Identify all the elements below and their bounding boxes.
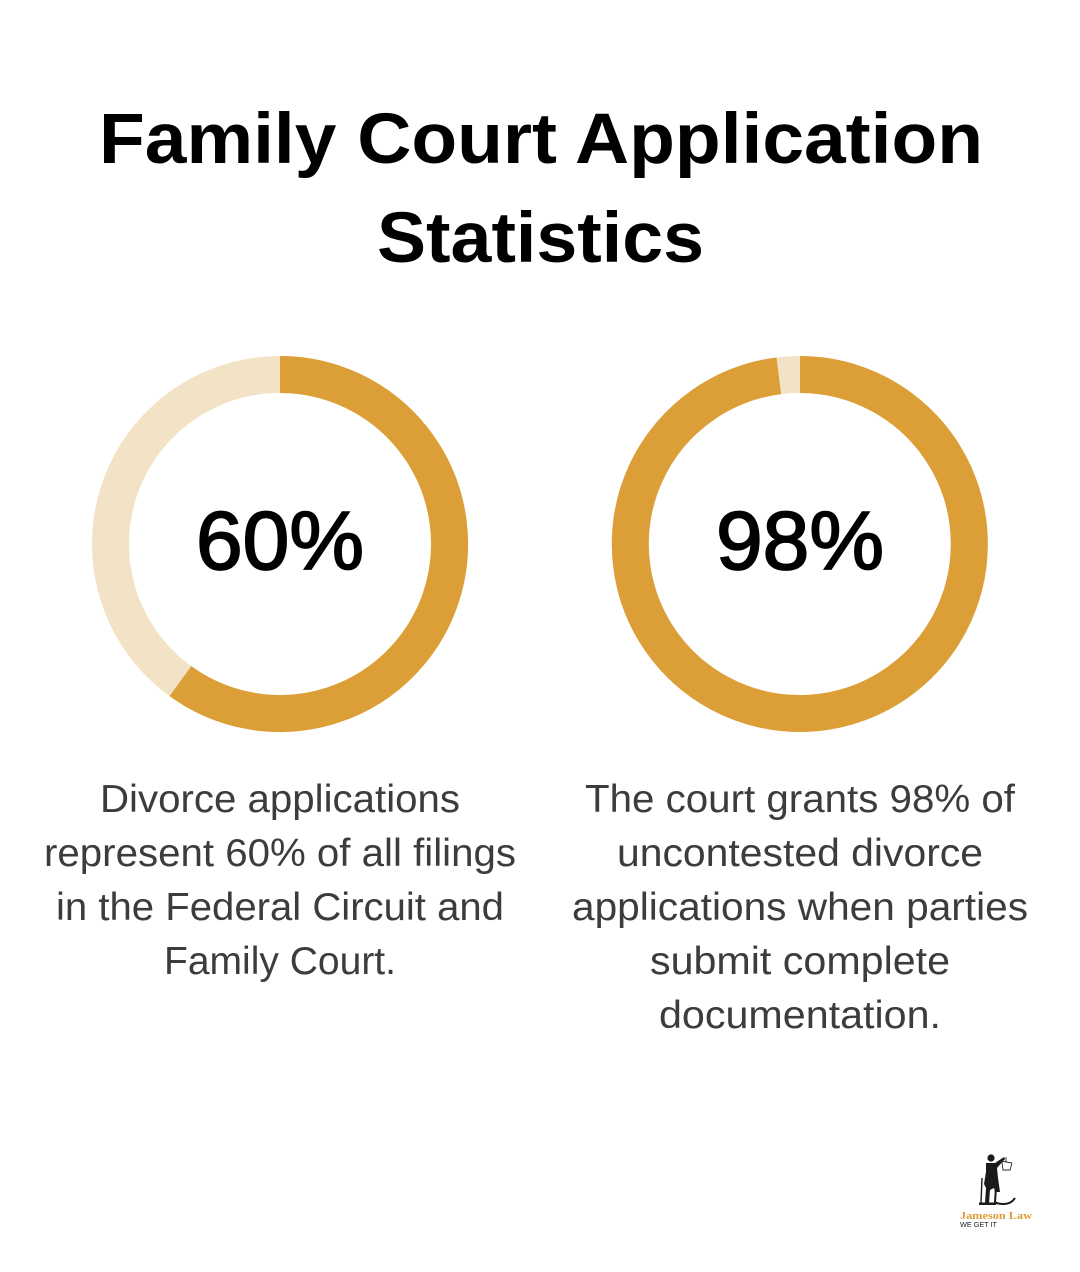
description: uncontested divorce: applications when parties	[572, 886, 1028, 929]
stat value: 60%: 60%	[196, 494, 364, 587]
description: divorce applications: Divorce applications	[100, 778, 460, 821]
description: uncontested divorce: documentation.	[659, 994, 941, 1037]
description: uncontested divorce: The court grants 98% of	[585, 778, 1015, 821]
description: uncontested divorce	[572, 778, 1028, 1037]
donut chart: 98%	[630, 374, 970, 714]
description: divorce applications: Family Court.	[164, 940, 396, 983]
title: Family Court Application	[99, 100, 983, 179]
title	[99, 100, 983, 278]
icon: lady justice	[979, 1154, 1015, 1205]
description: divorce applications: represent 60% of all filings	[44, 832, 516, 875]
description: divorce applications	[44, 778, 516, 983]
logo: Jameson Law	[960, 1154, 1032, 1229]
panel: uncontested divorce statistic	[572, 374, 1028, 1037]
donut chart: 60%	[110, 374, 450, 714]
panel: divorce applications statistic	[44, 374, 516, 983]
logo tagline: WE GET IT	[960, 1222, 998, 1229]
title: Statistics	[377, 199, 704, 278]
description: uncontested divorce: submit complete	[650, 940, 950, 983]
description: uncontested divorce: uncontested divorce	[617, 832, 983, 875]
stat value: 98%: 98%	[716, 494, 884, 587]
description: divorce applications: in the Federal Circuit and	[56, 886, 504, 929]
logo name: Jameson Law	[960, 1210, 1032, 1222]
